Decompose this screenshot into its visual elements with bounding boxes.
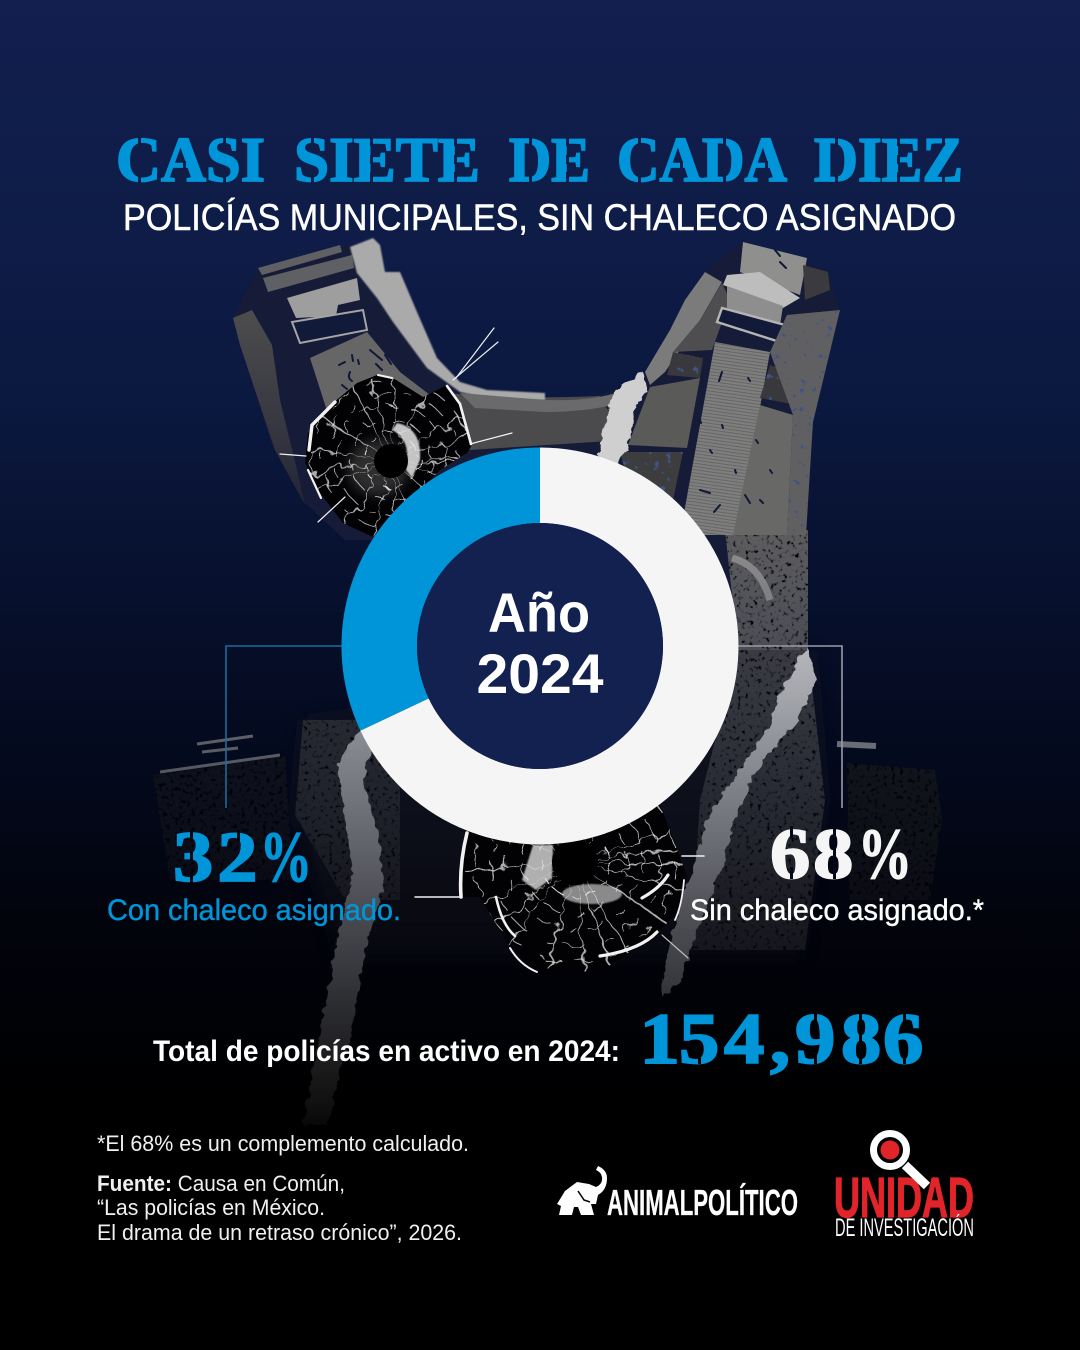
label con chaleco: Con chaleco asignado. bbox=[107, 894, 401, 927]
logo: Animal Político bbox=[557, 1166, 798, 1223]
vest tear lower left bbox=[303, 730, 383, 1125]
left buckle frame bbox=[292, 310, 367, 343]
centre label: 2024 bbox=[476, 642, 604, 705]
wordmark de investigacion: DE INVESTIGACIÓN bbox=[835, 1213, 974, 1242]
left outer panel bbox=[233, 310, 305, 505]
left pouch bbox=[153, 755, 292, 867]
label sin chaleco: Sin chaleco asignado.* bbox=[690, 894, 984, 927]
total value: 154,986 bbox=[640, 999, 923, 1079]
left buckle bbox=[287, 278, 360, 318]
background photo: ballistic vest bbox=[153, 238, 942, 1125]
logo: Unidad de Investigación bbox=[834, 1134, 974, 1242]
vest tear upper bbox=[598, 372, 647, 466]
leader line: 68% bbox=[738, 646, 842, 808]
source: “Las policías en México. bbox=[97, 1195, 325, 1220]
left pouch highlight bbox=[160, 736, 280, 772]
right outer panel bbox=[770, 310, 840, 535]
crack web bbox=[475, 762, 675, 962]
magnifier lens bbox=[874, 1134, 906, 1166]
right mid panel bbox=[725, 530, 808, 650]
left centre pad bbox=[310, 332, 429, 408]
impact glow bright bbox=[392, 423, 420, 478]
crack web bbox=[311, 380, 471, 540]
title bbox=[116, 125, 963, 195]
total label: Total de policías en activo en 2024: bbox=[153, 1035, 620, 1068]
centre lower panel bbox=[620, 452, 683, 500]
left speckled block bbox=[667, 352, 703, 378]
centre label: Año bbox=[488, 581, 590, 644]
right buckle frame bbox=[717, 308, 785, 343]
title: SIETE bbox=[294, 125, 480, 195]
left lower panel bbox=[295, 720, 400, 900]
lower vest body bbox=[304, 718, 715, 880]
donut chart bbox=[341, 448, 738, 844]
elephant ear bbox=[578, 1191, 590, 1202]
footnote: *El 68% es un complemento calculado. bbox=[97, 1131, 469, 1156]
bullet hole bottom bbox=[415, 762, 704, 973]
impact glow upper bbox=[522, 845, 553, 890]
value 32%: % bbox=[260, 817, 312, 897]
wordmark: ANIMALPOLÍTICO bbox=[607, 1182, 798, 1223]
shard highlights bbox=[280, 328, 512, 522]
impact glow lower bbox=[562, 884, 622, 904]
glass disc bbox=[460, 805, 687, 973]
source: El drama de un retraso crónico”, 2026. bbox=[97, 1220, 462, 1245]
right pouch highlight bbox=[837, 744, 876, 746]
right lower panel bbox=[690, 650, 825, 950]
right pouch bbox=[847, 763, 942, 900]
leader line: 32% bbox=[226, 646, 342, 808]
subtitle: POLICÍAS MUNICIPALES, SIN CHALECO ASIGNADO bbox=[123, 197, 956, 238]
title: DE bbox=[509, 125, 590, 195]
source: Fuente: Causa en Común, bbox=[97, 1171, 345, 1196]
slice: 68% sin chaleco bbox=[360, 448, 738, 844]
value 68%: 68 bbox=[770, 814, 853, 894]
wordmark unidad: UNIDAD bbox=[834, 1166, 974, 1230]
value 32%: 32 bbox=[173, 817, 258, 897]
impact hole bbox=[374, 444, 408, 478]
glass disc bbox=[305, 375, 472, 537]
right mid arc bbox=[732, 558, 770, 600]
right top strap bbox=[740, 242, 807, 295]
upper vest silhouette bbox=[234, 242, 840, 594]
collar band bbox=[460, 391, 648, 412]
impact glow bbox=[348, 440, 408, 496]
left top bands bbox=[258, 245, 354, 292]
shard highlights bbox=[415, 833, 704, 972]
right inner panel bbox=[628, 378, 700, 448]
right speckled block bbox=[760, 365, 789, 404]
right top dark blotch bbox=[803, 265, 830, 300]
title: DIEZ bbox=[814, 125, 963, 195]
right inner shoulder bbox=[673, 283, 730, 352]
left chest band bbox=[454, 394, 608, 450]
icon: elephant bbox=[557, 1166, 607, 1215]
value 32% bbox=[173, 817, 312, 897]
magnifier eye bbox=[880, 1140, 900, 1160]
magnifier handle bbox=[905, 1165, 927, 1186]
value 68%: % bbox=[858, 814, 912, 894]
right panel bbox=[733, 405, 793, 535]
impact hole bbox=[552, 839, 598, 885]
centre circle bbox=[417, 523, 663, 769]
right shoulder band bbox=[645, 272, 722, 385]
vest specks bbox=[339, 250, 786, 512]
neck binding bbox=[350, 238, 545, 400]
source bbox=[97, 1171, 462, 1245]
vest tear lower right bbox=[660, 647, 817, 995]
title: CASI bbox=[116, 125, 265, 195]
title: CADA bbox=[617, 125, 787, 195]
bullet hole top left bbox=[280, 328, 512, 540]
stat: 68% bbox=[690, 814, 984, 927]
slice: 32% con chaleco bbox=[341, 448, 540, 731]
right main strap bbox=[680, 342, 770, 535]
right buckle bbox=[723, 272, 800, 308]
centre label bbox=[476, 581, 604, 705]
right buckle lower bbox=[727, 286, 783, 325]
stat: 32% bbox=[107, 817, 401, 927]
value 68% bbox=[770, 814, 912, 894]
